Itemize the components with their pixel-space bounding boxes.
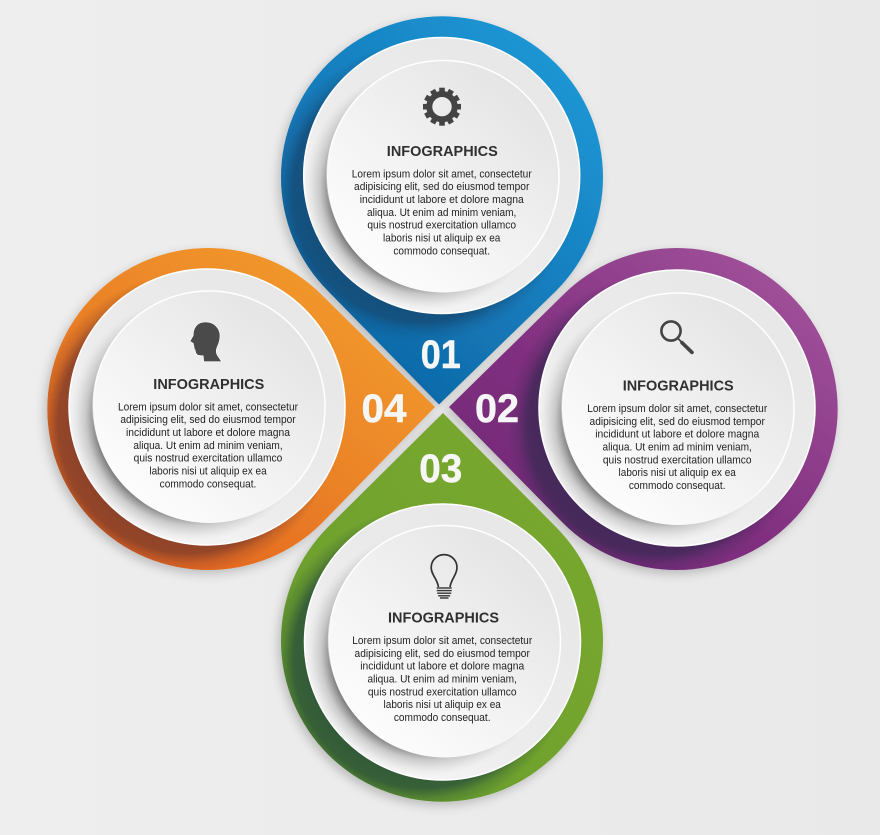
icon: magnifier <box>661 321 692 352</box>
outer white plate <box>69 269 345 545</box>
body text: laboris nisi ut aliquip ex ea <box>384 699 502 711</box>
body text: Lorem ipsum dolor sit amet, consectetur <box>352 168 532 180</box>
body text: aliqua. Ut enim ad minim veniam, <box>368 674 517 686</box>
body text <box>352 635 533 724</box>
body text: incididunt ut labore et dolore magna <box>360 661 525 673</box>
inner disc <box>562 293 794 525</box>
body text <box>587 403 768 492</box>
teardrop shape <box>281 16 603 404</box>
plate shadow on teardrop <box>281 522 550 802</box>
disc shadow <box>544 321 736 538</box>
panel 01: blue teardrop <box>272 16 603 404</box>
body text: Lorem ipsum dolor sit amet, consectetur <box>352 635 533 647</box>
icon: gear <box>423 88 461 126</box>
body text: commodo consequat. <box>394 712 491 724</box>
body text: incididunt ut labore et dolore magna <box>595 429 760 441</box>
heading: INFOGRAPHICS <box>388 609 499 626</box>
icon: light bulb <box>431 555 457 598</box>
body text: adipisicing elit, sed do eiusmod tempor <box>590 416 765 428</box>
icon: head silhouette <box>190 322 222 362</box>
heading: INFOGRAPHICS <box>153 376 264 393</box>
teardrop shape <box>449 248 838 570</box>
number 01: 01 <box>421 333 461 377</box>
body text: aliqua. Ut enim ad minim veniam, <box>133 440 283 452</box>
disc shadow <box>310 553 502 771</box>
body text: Lorem ipsum dolor sit amet, consectetur <box>587 403 768 415</box>
body text: adipisicing elit, sed do eiusmod tempor <box>355 648 530 660</box>
body text: quis nostrud exercitation ullamco <box>367 220 516 232</box>
heading: INFOGRAPHICS <box>387 143 498 160</box>
plate shadow on teardrop <box>47 284 317 570</box>
body text: commodo consequat. <box>393 245 490 257</box>
body text: adipisicing elit, sed do eiusmod tempor <box>354 181 530 193</box>
number 03: 03 <box>419 447 462 491</box>
body text: quis nostrud exercitation ullamco <box>603 454 752 466</box>
body text <box>118 401 298 490</box>
plate shadow on teardrop <box>281 56 548 337</box>
number 02: 02 <box>475 387 519 431</box>
body text: laboris nisi ut aliquip ex ea <box>619 467 737 479</box>
plate shadow on teardrop <box>512 288 782 570</box>
panel 02: purple teardrop <box>449 248 838 575</box>
body text: incididunt ut labore et dolore magna <box>360 194 525 206</box>
outer white plate <box>304 38 580 314</box>
body text: laboris nisi ut aliquip ex ea <box>383 232 501 244</box>
body text: aliqua. Ut enim ad minim veniam, <box>603 442 752 454</box>
teardrop shape <box>281 413 603 802</box>
outer white plate <box>539 270 815 546</box>
inner disc <box>328 526 560 758</box>
body text: adipisicing elit, sed do eiusmod tempor <box>120 414 296 426</box>
body text: laboris nisi ut aliquip ex ea <box>149 466 267 478</box>
disc shadow <box>74 319 268 536</box>
body text: commodo consequat. <box>629 480 726 492</box>
panel 03: green teardrop <box>272 413 603 809</box>
body text: incididunt ut labore et dolore magna <box>126 427 291 439</box>
body text: quis nostrud exercitation ullamco <box>134 453 282 465</box>
teardrop shape <box>47 248 435 570</box>
body text: quis nostrud exercitation ullamco <box>368 686 517 698</box>
outer white plate <box>304 504 580 780</box>
body text: Lorem ipsum dolor sit amet, consectetur <box>118 401 298 413</box>
inner disc <box>93 291 325 523</box>
body text: commodo consequat. <box>160 478 256 490</box>
body text: aliqua. Ut enim ad minim veniam, <box>367 207 516 219</box>
panel 04: orange teardrop <box>37 248 435 574</box>
number 04: 04 <box>362 387 407 431</box>
disc shadow <box>308 88 500 306</box>
heading: INFOGRAPHICS <box>623 378 734 395</box>
inner disc <box>327 60 559 292</box>
body text <box>352 168 532 257</box>
